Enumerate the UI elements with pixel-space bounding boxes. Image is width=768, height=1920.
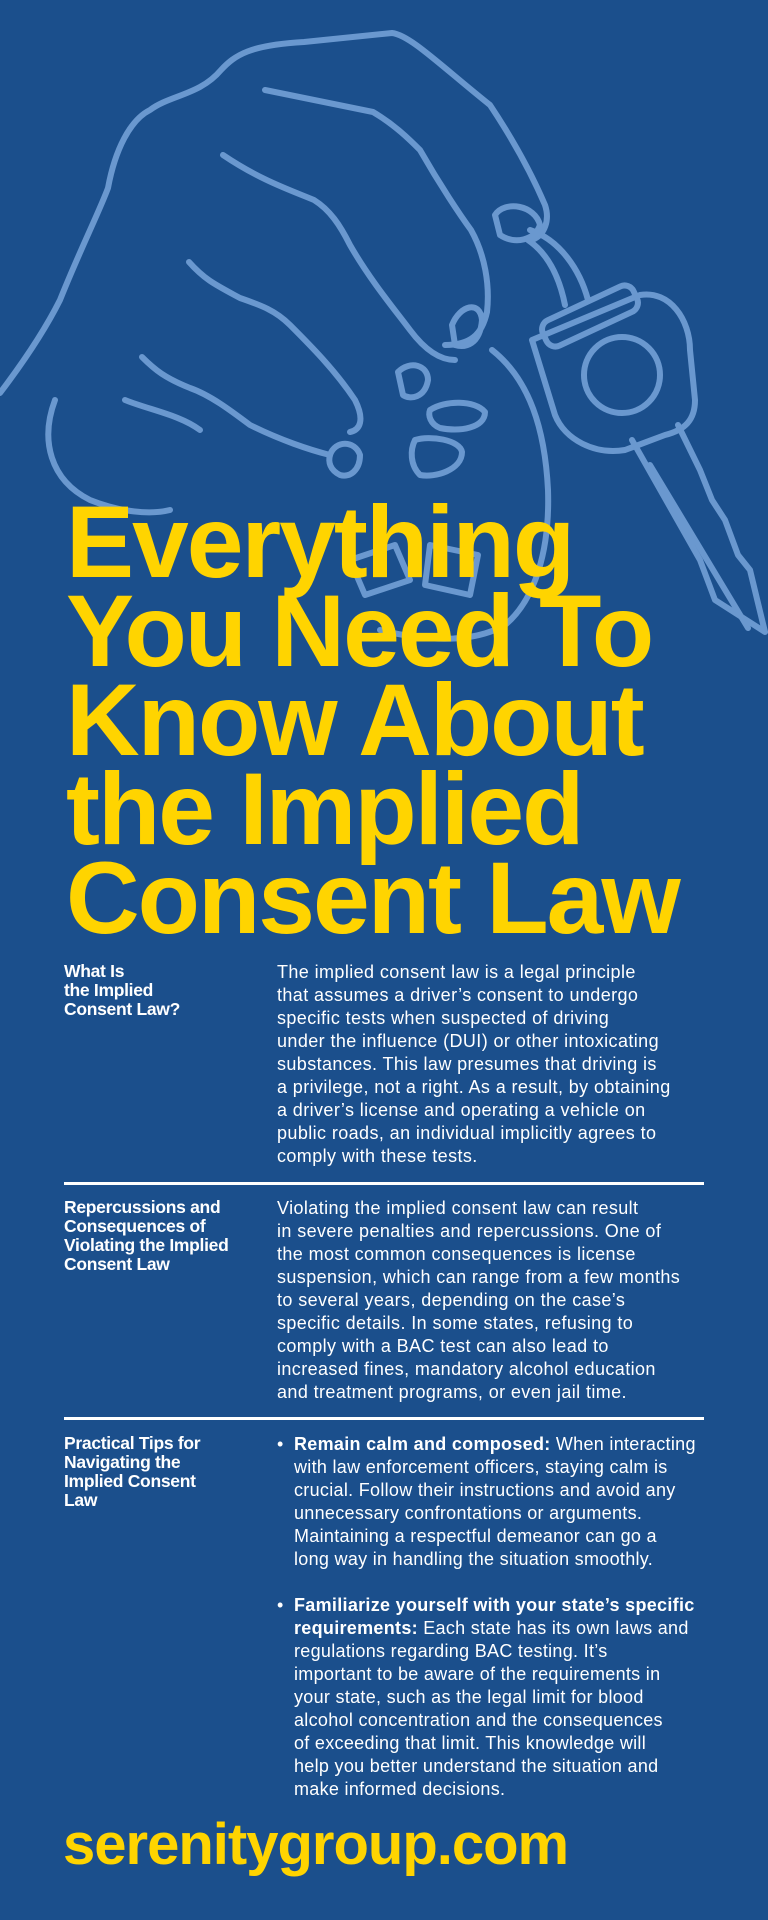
- bullet 2: your state, such as the legal limit for blood: [294, 1687, 644, 1707]
- bullet 2: [277, 1595, 695, 1799]
- title: [66, 485, 681, 955]
- bullet 2: important to be aware of the requirements in: [294, 1664, 660, 1684]
- section 3 heading: [64, 1433, 200, 1510]
- section 2 heading: Violating the Implied: [64, 1235, 229, 1255]
- bullet 2: requirements: Each state has its own laws and: [294, 1618, 689, 1638]
- bullet 1: long way in handling the situation smoothly.: [294, 1549, 653, 1569]
- section 1 heading: the Implied: [64, 980, 153, 1000]
- title: the Implied: [66, 752, 582, 866]
- section 1 body: substances. This law presumes that driving is: [277, 1054, 657, 1074]
- bullet 1: with law enforcement officers, staying calm is: [294, 1457, 668, 1477]
- section 1 body: comply with these tests.: [277, 1146, 478, 1166]
- section 1 body: public roads, an individual implicitly agrees to: [277, 1123, 656, 1143]
- title: Consent Law: [66, 841, 679, 955]
- bullet 2: regulations regarding BAC testing. It’s: [294, 1641, 608, 1661]
- section 1 heading: [64, 961, 180, 1019]
- bullet 2: alcohol concentration and the consequences: [294, 1710, 663, 1730]
- section 1 heading: Consent Law?: [64, 999, 180, 1019]
- bullet 1: •: [277, 1434, 284, 1454]
- section 2 heading: Repercussions and: [64, 1197, 220, 1217]
- section 1 body: a driver’s license and operating a vehicle on: [277, 1100, 646, 1120]
- section 3 heading: Implied Consent: [64, 1471, 196, 1491]
- section 1 heading: What Is: [64, 961, 124, 981]
- section 2 body: the most common consequences is license: [277, 1244, 636, 1264]
- bullet 1: unnecessary confrontations or arguments.: [294, 1503, 642, 1523]
- bullet 2: of exceeding that limit. This knowledge will: [294, 1733, 646, 1753]
- section 2 body: [277, 1198, 680, 1402]
- bullet 2: make informed decisions.: [294, 1779, 505, 1799]
- section 2 body: suspension, which can range from a few months: [277, 1267, 680, 1287]
- section 1 body: The implied consent law is a legal principle: [277, 962, 636, 982]
- title: You Need To: [66, 574, 652, 688]
- bullet 1: Maintaining a respectful demeanor can go a: [294, 1526, 657, 1546]
- bullet 2: Familiarize yourself with your state’s specific: [294, 1595, 695, 1615]
- illustration: hand holding car keys: [0, 30, 768, 642]
- section 2 body: comply with a BAC test can also lead to: [277, 1336, 609, 1356]
- section 2 body: to several years, depending on the case’s: [277, 1290, 625, 1310]
- bullet 1: crucial. Follow their instructions and avoid any: [294, 1480, 676, 1500]
- section 2 body: in severe penalties and repercussions. One of: [277, 1221, 661, 1241]
- section 1 body: [277, 962, 671, 1166]
- section 2 body: Violating the implied consent law can result: [277, 1198, 638, 1218]
- footer logo: serenitygroup.com: [63, 1812, 568, 1877]
- section 3 heading: Navigating the: [64, 1452, 180, 1472]
- section 2 heading: [64, 1197, 229, 1274]
- section 1 body: a privilege, not a right. As a result, by obtaining: [277, 1077, 671, 1097]
- section 3 heading: Law: [64, 1490, 97, 1510]
- section 2 body: increased fines, mandatory alcohol education: [277, 1359, 656, 1379]
- bullet 2: help you better understand the situation and: [294, 1756, 658, 1776]
- bullet 1: Remain calm and composed: When interacting: [294, 1434, 696, 1454]
- section 1 body: under the influence (DUI) or other intoxicating: [277, 1031, 659, 1051]
- section 1 body: specific tests when suspected of driving: [277, 1008, 609, 1028]
- section 2 heading: Consequences of: [64, 1216, 205, 1236]
- section 2 body: and treatment programs, or even jail time.: [277, 1382, 627, 1402]
- bullet 1: [277, 1434, 696, 1569]
- section 3 heading: Practical Tips for: [64, 1433, 200, 1453]
- section 2 heading: Consent Law: [64, 1254, 170, 1274]
- section 2 body: specific details. In some states, refusing to: [277, 1313, 633, 1333]
- bullet 2: •: [277, 1595, 284, 1615]
- section 1 body: that assumes a driver’s consent to undergo: [277, 985, 638, 1005]
- title: Know About: [66, 663, 643, 777]
- title: Everything: [66, 485, 573, 599]
